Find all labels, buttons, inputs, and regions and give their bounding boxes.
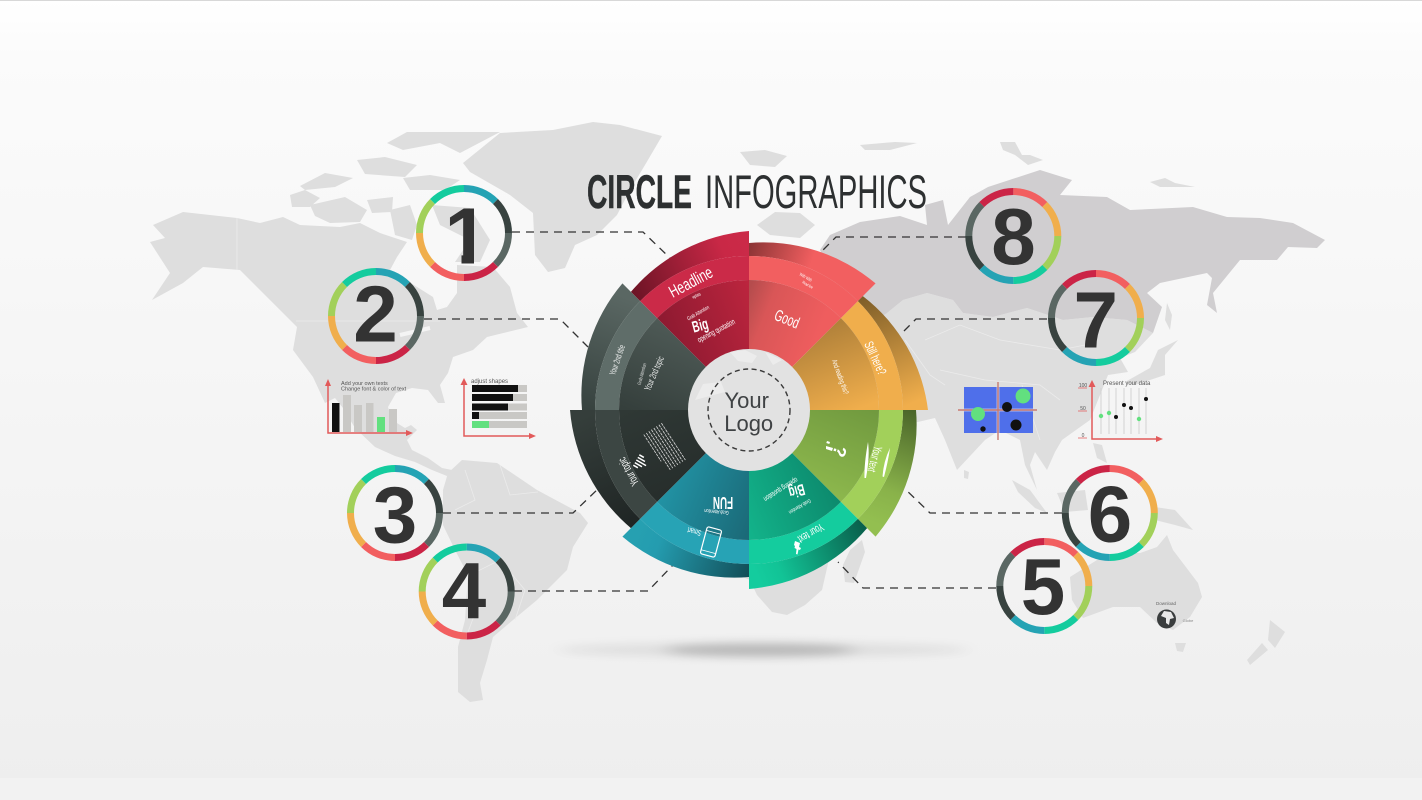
- badge 4: 4: [442, 546, 487, 635]
- sector text: green: [826, 441, 890, 478]
- sector text: teal green: [762, 475, 826, 554]
- badge 8: [969, 192, 1058, 281]
- sector: teal green: [660, 410, 868, 618]
- North America: [150, 212, 528, 476]
- sector text: amber: Still here?: [861, 339, 889, 377]
- center logo: [688, 349, 810, 471]
- badge 7: [1052, 274, 1140, 365]
- Asia: [800, 250, 1153, 490]
- title regular word: INFOGRAPHICS: [705, 165, 927, 218]
- badge 4: [422, 546, 511, 636]
- chart: horizontal bars: [460, 378, 536, 439]
- icon: download globe: Download: [1156, 601, 1177, 606]
- sector text: grey: [607, 343, 666, 392]
- South America: [443, 460, 588, 702]
- Tasmania: [1175, 643, 1186, 652]
- badge 6: [1065, 468, 1154, 559]
- Sakhalin: [1165, 303, 1172, 330]
- badge 5: 5: [1021, 542, 1065, 631]
- New Guinea: [1155, 507, 1193, 530]
- badge 1: 1: [444, 191, 489, 280]
- Indonesia: [1012, 480, 1047, 513]
- icon: fork and knife: [864, 442, 890, 478]
- sector text: red: Big: [690, 315, 710, 336]
- circular wheel: [541, 202, 953, 618]
- chart: column chart: [325, 379, 413, 436]
- Russia: [820, 170, 1325, 333]
- Madagascar: [843, 540, 865, 583]
- sector text: teal: [687, 492, 733, 557]
- sector: green: [749, 410, 917, 537]
- badge 8: 8: [991, 192, 1036, 281]
- sector text: coral: Read line: [801, 280, 814, 290]
- icon: exclamation dots: [826, 441, 833, 451]
- badge 7: 7: [1073, 276, 1118, 365]
- sector: amber: [749, 295, 953, 499]
- paragraph block: [644, 423, 685, 471]
- badge 2: 2: [353, 270, 398, 359]
- dashed connectors: [424, 232, 1062, 591]
- sector: black: [541, 321, 749, 529]
- sector text: red: [666, 264, 737, 345]
- chart: quadrant bubbles: [958, 382, 1037, 440]
- chart: dot plot: 0: [1082, 433, 1085, 439]
- icon: phone: [700, 527, 722, 557]
- badge 1: [420, 188, 508, 280]
- sector text: grey: Your 2nd title: [607, 343, 627, 377]
- sector text: teal green: Your text: [795, 520, 826, 545]
- icon: download globe: Globe: [1183, 618, 1194, 623]
- sector: teal: [622, 410, 749, 578]
- sector text: teal: FUN: [713, 492, 733, 512]
- sector text: teal green: opening quotation: [762, 475, 799, 503]
- Europe and Scandinavia: [757, 212, 815, 238]
- sector: grey: [581, 283, 749, 410]
- sector text: red: Grab Attention: [686, 304, 711, 323]
- number badges: [332, 188, 1154, 636]
- sector text: teal: Smart: [687, 525, 702, 537]
- badge 6: 6: [1088, 470, 1132, 559]
- sector text: amber: And reading this?: [830, 359, 850, 396]
- Australia: [1070, 535, 1202, 630]
- center logo: Your: [724, 388, 769, 413]
- sector text: green: Your text: [864, 444, 884, 473]
- title: [587, 165, 927, 218]
- badge 5: [1000, 542, 1089, 631]
- sector text: red: opening quotation: [696, 318, 737, 345]
- sector text: teal green: Grab Attention: [787, 497, 812, 515]
- Arctic Russia islands: [1000, 142, 1043, 165]
- chart: dot plot: [1078, 380, 1163, 442]
- sector text: green: ?: [828, 444, 851, 459]
- sector text: black: [616, 423, 685, 488]
- chart: column chart: Change font & color of text: [341, 386, 407, 392]
- chart: horizontal bars: adjust shapes: [471, 379, 508, 385]
- badge 3: [350, 468, 440, 560]
- sector text: teal green: Big: [787, 480, 807, 502]
- sector: coral good: [749, 242, 876, 410]
- sector text: coral: [772, 271, 814, 332]
- sector text: coral: With With: [799, 271, 813, 283]
- Greenland: [463, 122, 662, 272]
- ground shadow: [558, 643, 968, 657]
- sector text: black: Your topic: [616, 455, 642, 488]
- sector: red headline: [630, 202, 838, 410]
- sector text: red: Headline: [666, 264, 716, 302]
- sector text: grey: Grab Attention: [636, 362, 648, 386]
- map borders: [237, 218, 1085, 640]
- sector text: teal: Grab Attention: [704, 507, 729, 516]
- chart: dot plot: Present your data: [1103, 381, 1151, 387]
- chart: dot plot: 50: [1080, 406, 1086, 412]
- sector text: amber: [830, 339, 889, 396]
- Africa: [700, 555, 830, 615]
- title bold word: CIRCLE: [587, 165, 692, 218]
- sector text: coral: Good: [772, 306, 802, 332]
- icon: download globe: [1156, 601, 1194, 628]
- sector text: grey: Your 2nd topic: [642, 355, 666, 392]
- Arctic islands: [387, 132, 500, 153]
- center logo: Logo: [724, 411, 773, 436]
- icon: small tool: [794, 541, 801, 554]
- badge 2: [332, 270, 420, 360]
- Svalbard: [740, 150, 787, 167]
- world map: [150, 122, 1285, 702]
- Sri Lanka: [964, 470, 969, 479]
- Japan: [1125, 340, 1178, 385]
- icon: chart mark: [633, 455, 649, 471]
- chart: dot plot: 100: [1079, 383, 1087, 389]
- chart: column chart: Add your own texts: [341, 381, 388, 387]
- sector text: red: wpbtts: [691, 291, 702, 300]
- badge 3: 3: [373, 471, 417, 560]
- New Zealand: [1268, 620, 1285, 648]
